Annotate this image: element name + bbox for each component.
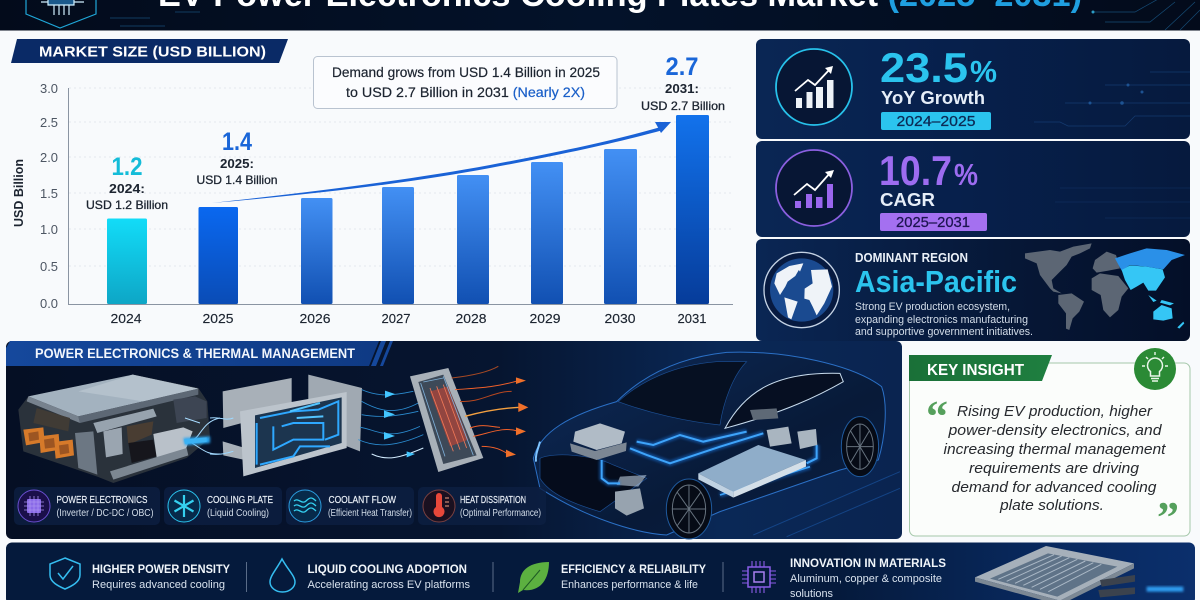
arrow: growth trend [212, 122, 671, 203]
components [573, 423, 625, 450]
header banner [0, 0, 1200, 30]
legend: heat dissipation: HEAT DISSIPATION [460, 495, 526, 506]
illustration: cooling plate device [975, 546, 1183, 600]
x axis labels: 2030 [604, 311, 636, 326]
driver: innovation in materials [742, 556, 946, 600]
x axis labels [110, 311, 706, 326]
legend: coolant flow: COOLANT FLOW [328, 495, 396, 506]
value label 2025: USD 1.4 Billion [196, 173, 278, 187]
value label 2025: 1.4 [222, 128, 252, 156]
label: CAGR: CAGR [880, 189, 935, 210]
panel: CAGR [756, 141, 1190, 237]
label: dominant region: DOMINANT REGION [855, 251, 968, 265]
x axis labels: 2026 [300, 311, 330, 326]
heading: market size: MARKET SIZE (USD BILLION) [39, 44, 266, 60]
driver: higher power density: HIGHER POWER DENSITY [92, 562, 230, 576]
driver: innovation in materials: INNOVATION IN MATERIALS [790, 556, 946, 570]
legend: cooling plate [164, 487, 282, 525]
quote text: demand for advanced cooling [952, 479, 1157, 496]
pill: 2025–2031 [880, 213, 987, 231]
value label 2025 [196, 128, 278, 187]
driver: innovation in materials: solutions [790, 588, 833, 600]
arrows: heat flow [452, 366, 528, 457]
driver: higher power density: Requires advanced cooling [92, 579, 225, 591]
legend: power electronics: (Inverter / DC-DC / OBC) [56, 508, 154, 519]
legend: power electronics [14, 487, 160, 525]
legend: heat dissipation [418, 487, 546, 525]
pill: 2025–2031: 2025–2031 [896, 215, 970, 231]
icon: growth chart purple [776, 150, 852, 226]
panel: bottom drivers strip [6, 542, 1195, 600]
driver: innovation in materials: Aluminum, copper & composite [790, 573, 942, 585]
axes [68, 88, 733, 304]
illustration: inverter unit [18, 375, 220, 483]
y axis ticks and grid: 0.5 [40, 260, 58, 274]
arrows: coolant flow [358, 390, 423, 458]
heading: market size [11, 39, 288, 63]
quote marks: ” [1157, 493, 1179, 542]
heading: key insight [909, 355, 1052, 381]
world map [1025, 243, 1185, 330]
quote text [944, 403, 1166, 514]
value label 2031 [641, 53, 725, 113]
stat: 23.5% [880, 44, 997, 91]
value label 2025: 2025: [220, 157, 254, 171]
value label 2024: 2024: [109, 182, 145, 196]
region description: expanding electronics manufacturing [855, 314, 1028, 326]
circuit decoration [1034, 72, 1190, 126]
illustration: heat dissipation plate [410, 368, 483, 472]
icon: chip logo hexagon [26, 0, 96, 28]
battery pack [698, 445, 806, 492]
icon: globe [764, 252, 839, 328]
quote marks [926, 392, 1179, 542]
y axis ticks and grid: 1.0 [40, 223, 58, 237]
illustration: cooling plate [210, 375, 362, 476]
x axis labels: 2027 [382, 311, 410, 326]
pill: 2024–2025: 2024–2025 [896, 114, 976, 130]
y axis ticks and grid: 2.0 [40, 151, 58, 165]
callout [314, 56, 617, 108]
stat: 23.5%: 23.5 [880, 44, 968, 91]
icon: lightbulb [1134, 348, 1176, 390]
wheels [666, 417, 879, 539]
illustration: electric car [533, 352, 900, 539]
pipes glow [602, 432, 817, 495]
value label 2024: 1.2 [112, 153, 142, 181]
panel: YoY growth [756, 39, 1190, 139]
panel: dominant region [756, 239, 1190, 341]
driver: liquid cooling adoption [270, 559, 470, 592]
region description: Strong EV production ecosystem, [855, 301, 1010, 313]
quote text: power-density electronics, and [947, 422, 1162, 439]
stat: 10.7%: % [954, 157, 978, 192]
value label 2024: USD 1.2 Billion [86, 198, 168, 212]
x axis labels: 2025 [202, 311, 234, 326]
panel: market size chart [11, 39, 733, 326]
callout: to USD 2.7 Billion in 2031 (Nearly 2X) [346, 85, 585, 100]
y axis ticks and grid: 2.5 [40, 116, 58, 130]
heading: power electronics [6, 341, 393, 366]
header circuit decoration [110, 0, 1200, 30]
legend: coolant flow [286, 487, 414, 525]
stat: 23.5%: % [970, 54, 997, 89]
circuit decoration [1055, 188, 1190, 218]
driver: higher power density [50, 558, 230, 591]
y axis ticks and grid: 3.0 [40, 82, 58, 96]
legend: coolant flow: (Efficient Heat Transfer) [328, 508, 412, 519]
y axis title: USD Billion [12, 159, 26, 227]
legend: cooling plate: COOLING PLATE [207, 495, 273, 506]
x axis labels: 2024 [110, 311, 142, 326]
region name: Asia-Pacific [855, 264, 1017, 299]
legend: cooling plate: (Liquid Cooling) [207, 508, 269, 519]
driver: efficiency and reliability [518, 562, 706, 593]
bar chart [107, 115, 709, 304]
region description [855, 301, 1033, 338]
callout: Demand grows from USD 1.4 Billion in 2025 [332, 65, 600, 80]
y axis ticks and grid: 0.0 [40, 297, 58, 311]
driver: efficiency and reliability: EFFICIENCY & RELIABILITY [561, 562, 706, 576]
legend: power electronics: POWER ELECTRONICS [56, 495, 148, 506]
quote text: plate solutions. [999, 497, 1104, 514]
label: YoY Growth: YoY Growth [881, 87, 985, 108]
panel: power electronics and thermal management [6, 341, 902, 539]
x axis labels: 2028 [456, 311, 486, 326]
quote text: requirements are driving [969, 460, 1140, 477]
driver: liquid cooling adoption: Accelerating across EV platforms [308, 579, 470, 591]
stat: 10.7%: 10.7 [879, 147, 952, 194]
y axis ticks and grid [40, 82, 733, 311]
quote text: Rising EV production, higher [957, 403, 1153, 420]
driver: liquid cooling adoption: LIQUID COOLING ADOPTION [308, 562, 467, 576]
heading: key insight: KEY INSIGHT [927, 362, 1024, 379]
pill: 2024–2025 [881, 112, 991, 130]
value label 2031: 2031: [665, 82, 699, 96]
quote marks: “ [926, 392, 948, 441]
panel: key insight [909, 348, 1190, 542]
value label 2031: 2.7 [666, 53, 698, 81]
value label 2024 [86, 153, 168, 212]
x axis labels: 2031 [678, 311, 706, 326]
heading: power electronics: POWER ELECTRONICS & THERMAL MANAGEMENT [35, 346, 356, 361]
region description: and supportive government initiatives. [855, 326, 1033, 338]
driver: efficiency and reliability: Enhances performance & life [561, 579, 698, 591]
value label 2031: USD 2.7 Billion [641, 99, 725, 113]
icon: growth chart [776, 49, 852, 125]
quote text: increasing thermal management [944, 441, 1166, 458]
dividers [246, 562, 723, 592]
y axis ticks and grid: 1.5 [40, 187, 58, 201]
x axis labels: 2029 [530, 311, 560, 326]
legend: heat dissipation: (Optimal Performance) [460, 508, 541, 519]
pipes [602, 432, 817, 495]
